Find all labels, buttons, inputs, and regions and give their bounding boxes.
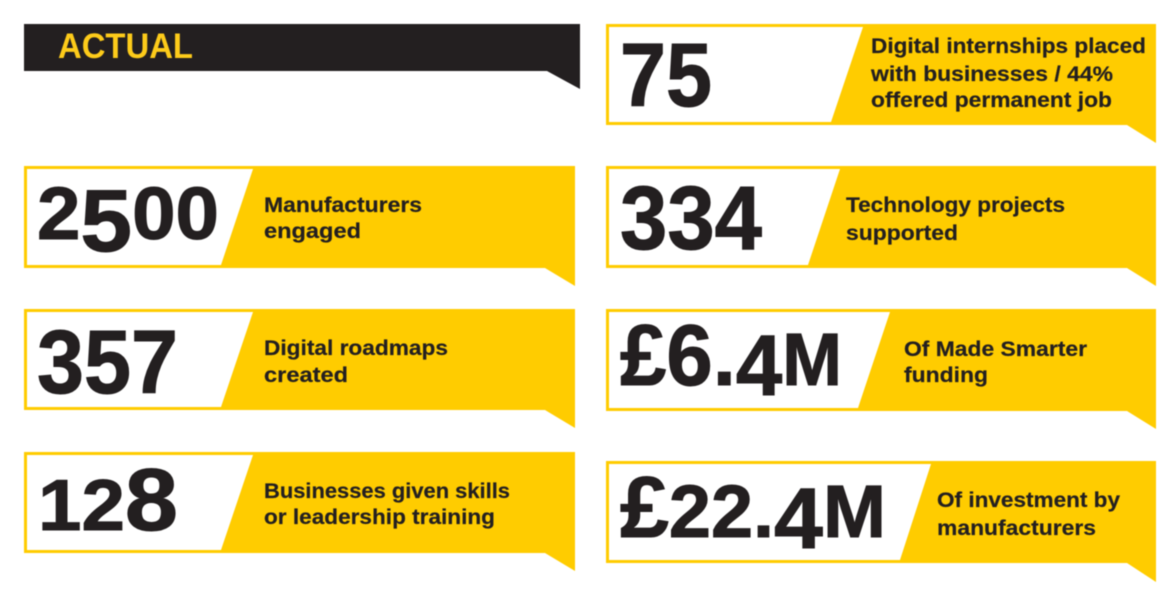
number: 75: 75 — [620, 26, 712, 126]
label: digital roadmaps created — [264, 337, 448, 387]
label: digital internships — [870, 35, 1146, 112]
number: £22.4M: M — [823, 470, 886, 553]
number: £6.4M: M — [782, 318, 842, 401]
number: 334: 334 — [620, 169, 762, 269]
label: businesses given skills — [264, 480, 510, 529]
panel: 357 digital roadmaps — [24, 309, 575, 428]
label: investment by manufacturers: manufacturers — [937, 517, 1096, 540]
label: technology projects supported — [846, 194, 1065, 245]
panel: 334 technology projects — [606, 166, 1156, 286]
label: digital internships: with businesses / 44% — [870, 63, 1113, 86]
label: made smarter funding: funding — [904, 364, 988, 387]
label: manufacturers engaged: engaged — [264, 220, 361, 243]
panel: 6.4M funding — [606, 308, 1156, 429]
label: businesses given skills: or leadership training — [264, 506, 495, 529]
number: £22.4M: £22. — [620, 460, 772, 556]
heading: ACTUAL: ACTUAL — [58, 27, 193, 66]
label: manufacturers engaged: Manufacturers — [264, 194, 422, 217]
label: businesses given skills: Businesses given skills — [264, 480, 510, 503]
panel: 75 digital internships — [606, 24, 1156, 143]
label: made smarter funding: Of Made Smarter — [904, 338, 1087, 361]
number: 2500: 2 — [37, 172, 78, 255]
label: manufacturers engaged — [264, 194, 422, 243]
label: digital roadmaps created: Digital roadmaps — [264, 337, 448, 360]
label: digital roadmaps created: created — [264, 364, 348, 387]
label: investment by manufacturers: Of investment by — [937, 489, 1120, 512]
panel: 22.4M investment — [606, 460, 1156, 582]
number: 2500: 00 — [132, 172, 219, 255]
panel: 2500 manufacturers engaged — [24, 166, 575, 286]
panel: 128 businesses trained — [24, 450, 575, 571]
label: digital internships: offered permanent job — [871, 89, 1112, 112]
label: made smarter funding — [904, 338, 1087, 387]
banner: ACTUAL — [24, 24, 580, 89]
number: £6.4M: £6. — [620, 308, 740, 404]
number: £22.4M: 4 — [774, 471, 823, 567]
label: technology projects supported: Technology projects — [846, 194, 1065, 217]
number: £6.4M: 4 — [736, 318, 782, 414]
number: 357: 357 — [37, 313, 178, 413]
number: 128: 128 — [38, 450, 178, 549]
number: 2500: 5 — [80, 171, 132, 270]
label: digital internships: Digital internships placed — [871, 35, 1146, 58]
label: investment by manufacturers — [937, 489, 1120, 540]
label: technology projects supported: supported — [846, 222, 958, 245]
